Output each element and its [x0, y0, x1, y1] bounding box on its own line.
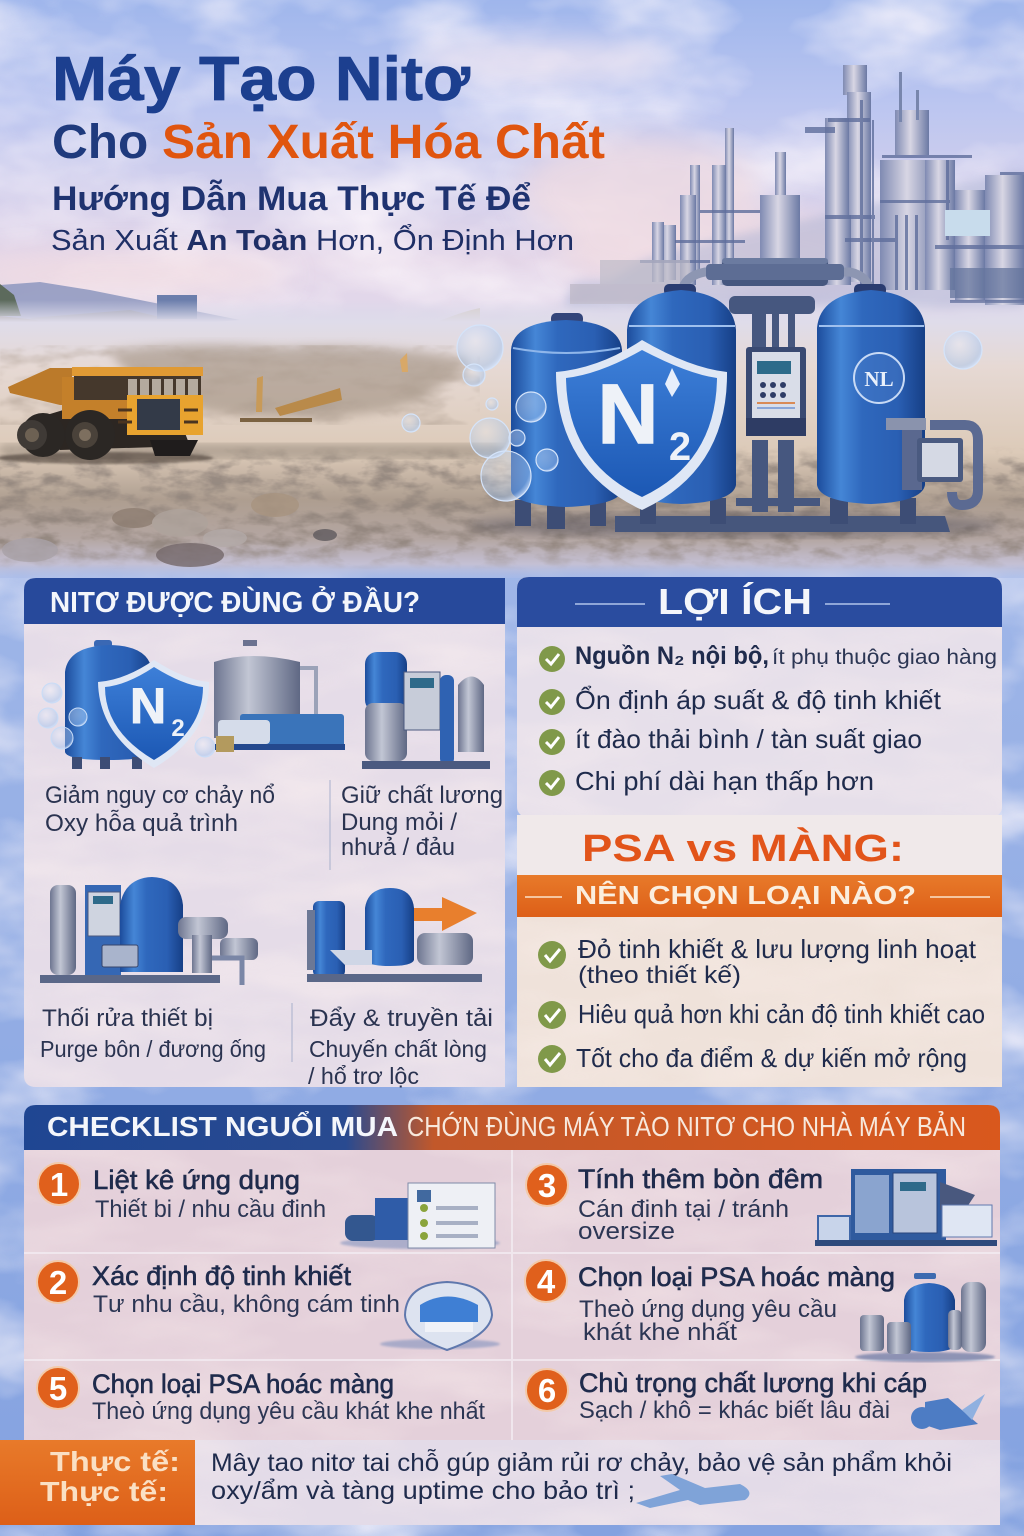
text: pushing and transfer: Đẩy & truyền tải — [310, 1005, 493, 1032]
step 6 — [526, 1368, 985, 1430]
top pipe — [682, 272, 870, 292]
orange band — [517, 875, 1002, 917]
panel: PSA versus membrane — [517, 815, 1002, 1087]
shield: N2: N — [598, 367, 658, 461]
text: reduce fire risk: Oxy hỗa quả trình — [45, 810, 238, 837]
benefit item: ít phụ thuộc giao hàng — [772, 646, 997, 669]
step 3: 3 — [538, 1167, 556, 1204]
icon: purge skid with blue tank — [40, 877, 258, 985]
title block: Máy Tạo Nitơ — [52, 45, 471, 114]
benefit item — [539, 642, 997, 672]
PSA point: Hiêu quả hơn khi cản độ tinh khiết cao — [578, 999, 985, 1029]
icon: checklist document with machine — [340, 1183, 500, 1249]
icon: steel tank with compressor — [214, 640, 345, 752]
step 5: 5 — [49, 1370, 67, 1407]
tank: middle — [627, 284, 736, 504]
step 4: Theò ứng dụng yêu cầu — [579, 1296, 837, 1323]
panel: where nitrogen is used — [24, 578, 505, 1089]
icon: tank with N2 shield: 2 — [171, 715, 185, 742]
icon: quarry conveyor in distance — [240, 353, 408, 422]
base plate — [615, 516, 950, 532]
text: keep quality — [341, 782, 503, 861]
PSA point — [538, 934, 977, 989]
control panel — [746, 347, 806, 436]
practical callout: Mây tao nitơ tai chỗ gúp giảm rủi rơ chảy, bảo vệ sản phẩm khỏi — [211, 1448, 952, 1477]
practical callout — [0, 1440, 1000, 1525]
orange band: NÊN CHỌN LOẠI NÀO? — [575, 880, 916, 910]
title block — [51, 45, 605, 257]
practical callout: Thực tế: — [50, 1446, 180, 1477]
heading: PSA vs MÀNG: — [582, 826, 904, 870]
heading: LỢI ÍCH — [658, 581, 812, 622]
step 4: 4 — [537, 1263, 556, 1300]
step 1 — [38, 1163, 500, 1249]
step 1: Thiết bi / nhu cầu đinh — [95, 1196, 326, 1223]
hero: nitrogen generator — [402, 258, 1000, 537]
step 4: khát khe nhất — [583, 1319, 737, 1346]
text: reduce fire risk: Giảm nguy cơ chảy nổ — [45, 782, 275, 809]
PSA point: (theo thiết kế) — [578, 962, 741, 989]
panel: buyer checklist — [24, 1105, 1000, 1440]
heading — [24, 578, 505, 624]
text: purge equipment: Purge bôn / đương ống — [40, 1036, 266, 1062]
step 3: oversize — [578, 1218, 675, 1245]
text: purge equipment: Thối rửa thiết bị — [42, 1005, 213, 1032]
benefit item: ít đào thải bình / tàn suất giao — [575, 724, 922, 754]
benefit item: Chi phí dài hạn thấp hơn — [575, 766, 874, 796]
step 6: Chù trọng chất lương khi cáp — [579, 1368, 927, 1398]
text: keep quality: Dung mỏi / — [341, 809, 457, 836]
title block: Cho Sản Xuất Hóa Chất — [52, 116, 605, 169]
step 2: 2 — [49, 1264, 67, 1301]
text: keep quality: nhưả / đảu — [341, 834, 455, 861]
step 3: Cán đinh tại / tránh — [578, 1196, 789, 1223]
PSA point: Đỏ tinh khiết & lưu lượng linh hoạt — [578, 934, 977, 964]
icon: tank with N2 shield — [38, 640, 215, 769]
step 6: Sạch / khô = khác biết lâu đài — [579, 1397, 890, 1424]
step 3: Tính thêm bòn đêm — [578, 1164, 823, 1194]
practical callout: Thực tế: — [40, 1476, 168, 1507]
step 4: Chọn loại PSA hoác màng — [578, 1262, 895, 1292]
benefit item: Nguồn N₂ nội bộ, — [575, 642, 769, 670]
text: purge equipment — [40, 1005, 266, 1062]
bubbles — [402, 325, 982, 501]
step 5: Theò ứng dụng yêu cầu khát khe nhất — [92, 1398, 485, 1425]
practical callout: oxy/ẩm và tàng uptime cho bảo trì ; — [211, 1477, 635, 1505]
step 5 — [37, 1367, 485, 1425]
manifold and pipes — [729, 296, 820, 512]
step 2: Tư nhu cầu, không cám tinh — [93, 1291, 400, 1318]
text: keep quality: Giữ chất lương — [341, 782, 503, 809]
title block: Hướng Dẫn Mua Thực Tế Để — [52, 180, 531, 218]
step 1: Liệt kê ứng dụng — [93, 1165, 300, 1195]
icon: tank with N2 shield: N — [130, 678, 166, 734]
step 3 — [526, 1164, 997, 1246]
shield: N2: 2 — [669, 425, 691, 469]
icon: tanks and cylinders — [855, 1273, 995, 1362]
hero: distant hills and mountains — [0, 282, 1024, 425]
heading — [24, 1105, 1000, 1150]
title block: Sản Xuất An Toàn Hơn, Ổn Định Hơn — [51, 223, 574, 257]
step 4 — [525, 1260, 995, 1362]
step 5: Chọn loại PSA hoác màng — [92, 1369, 394, 1399]
heading: NITƠ ĐƯỢC ĐÙNG Ở ĐẦU? — [50, 585, 420, 619]
icon: small plane-shaped equipment — [636, 1474, 749, 1508]
hero: distant chemical plant — [565, 65, 1024, 310]
tank: right — [817, 284, 925, 504]
step 1: 1 — [50, 1166, 68, 1203]
PSA point: Tốt cho đa điểm & dự kiến mở rộng — [576, 1043, 967, 1073]
shield: N2 — [556, 340, 727, 510]
icon: small blue equipment — [911, 1394, 985, 1430]
text: pushing and transfer: Chuyến chất lòng — [309, 1036, 487, 1062]
step 2 — [37, 1261, 500, 1350]
side valve and hose — [886, 418, 978, 505]
heading — [517, 577, 1002, 627]
step 6: 6 — [538, 1372, 556, 1409]
text: pushing and transfer — [308, 1005, 493, 1089]
icon: buffer tank machine — [815, 1169, 997, 1246]
benefit item: Ổn định áp suất & độ tinh khiết — [575, 685, 942, 715]
icon: purifier skid — [362, 652, 490, 769]
icon: transfer pump with orange arrow — [307, 888, 482, 982]
hero: ground — [0, 300, 1024, 578]
icon: purity shield — [380, 1282, 500, 1350]
step 2: Xác định độ tinh khiết — [92, 1261, 351, 1291]
text: pushing and transfer: / hổ trơ lộc — [308, 1063, 419, 1089]
tank: right: NL — [864, 367, 894, 391]
text: reduce fire risk — [45, 782, 275, 837]
tank feet — [515, 498, 916, 529]
tank: left — [511, 313, 622, 507]
icon: mining dump truck — [0, 367, 213, 464]
heading: CHECKLIST NGUỔI MUA — [47, 1111, 398, 1142]
panel: benefits — [517, 577, 1002, 817]
